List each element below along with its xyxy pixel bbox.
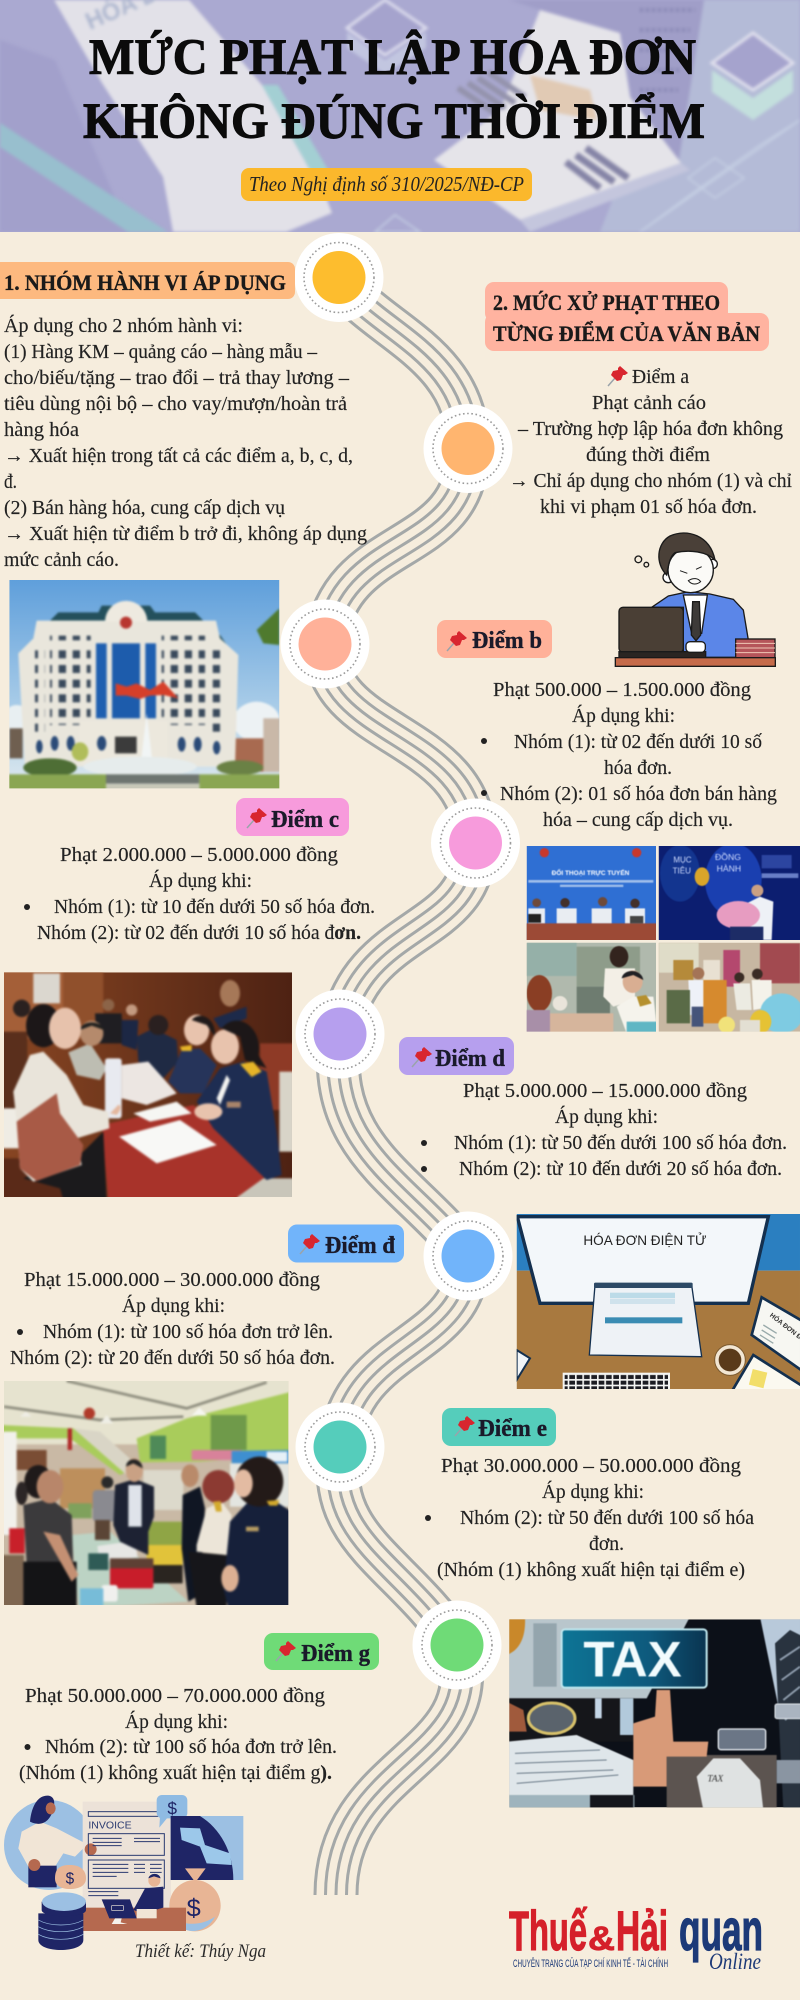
header background illustration — [0, 0, 800, 232]
badge: Điểm g — [264, 1633, 379, 1670]
logo: Thuế & Hải quan Online: Hải — [616, 1899, 668, 1962]
text block: Điểm a: khi vi phạm 01 số hóa đơn. — [540, 496, 757, 518]
timeline node 4 — [431, 798, 520, 888]
text block: Điểm a: Phạt cảnh cáo — [592, 392, 706, 414]
photo: officers at a fruit and grocery shop — [2, 1378, 292, 1608]
title: MỨC PHẠT LẬP HÓA ĐƠN — [89, 30, 696, 86]
section 1 body text: đ. — [4, 471, 17, 493]
badge: Điểm đ: Điểm đ — [325, 1233, 396, 1259]
text block: Điểm đ details: Áp dụng khi: — [122, 1294, 225, 1317]
text block: Điểm e details — [425, 1455, 754, 1581]
logo: Thuế & Hải quan Online: Online — [709, 1949, 761, 1974]
text block: Điểm c details — [24, 844, 375, 944]
illustration: e-invoice on a desktop monitor: HÓA ĐƠN ĐIỆN TỬ — [583, 1231, 707, 1248]
text block: Điểm e details: đơn. — [589, 1533, 624, 1555]
text block: Điểm d details — [421, 1080, 787, 1180]
timeline node 3 — [280, 600, 370, 688]
text block: Điểm b details: Nhóm (2): 01 số hóa đơn bán hàng — [500, 783, 777, 805]
text block: Điểm b details: Nhóm (1): từ 02 đến dưới 10 số — [514, 731, 762, 753]
photo collage: TAX button and documents — [507, 1617, 800, 1810]
icon: pushpin — [412, 1047, 432, 1067]
logo: Thuế & Hải quan Online: Thuế — [509, 1899, 587, 1962]
icon: pushpin — [300, 1234, 320, 1254]
text block: Điểm d details: Nhóm (2): từ 10 đến dưới 20 số hóa đơn. — [459, 1158, 782, 1180]
text block: Điểm b details: Áp dụng khi: — [572, 704, 675, 727]
timeline node 2 — [424, 404, 512, 493]
text block: Điểm d details: Nhóm (1): từ 50 đến dưới 100 số hóa đơn. — [454, 1132, 787, 1154]
section 1 body text: mức cảnh cáo. — [4, 549, 119, 571]
text block: Điểm đ details: Nhóm (2): từ 20 đến dưới 50 số hóa đơn. — [10, 1347, 335, 1369]
badge: Điểm b: Điểm b — [472, 628, 542, 654]
icon: pushpin — [447, 631, 467, 651]
icon: pushpin — [608, 366, 628, 386]
text block: Điểm e details: (Nhóm (1) không xuất hiện tại điểm e) — [437, 1559, 745, 1581]
panel: officer at a shop — [525, 943, 658, 1033]
text block: Điểm b details: hóa đơn. — [604, 757, 672, 779]
text block: Điểm g details: (Nhóm (1) không xuất hiện tại điểm g). — [19, 1762, 332, 1784]
section heading 1: 1. NHÓM HÀNH VI ÁP DỤNG — [4, 270, 286, 295]
title — [83, 30, 705, 150]
illustration: invoice, money bags and coins: INVOICE — [88, 1820, 132, 1831]
section heading 2: 2. MỨC XỬ PHẠT THEO — [493, 290, 720, 315]
title: KHÔNG ĐÚNG THỜI ĐIỂM — [83, 92, 705, 150]
section 1 body text: (2) Bán hàng hóa, cung cấp dịch vụ — [4, 497, 285, 519]
timeline node 6 — [424, 1212, 512, 1300]
panel: online dialogue: ĐỐI THOẠI TRỰC TUYẾN — [552, 867, 630, 877]
panel: conference speaker: TIÊU — [673, 866, 691, 875]
text block: Điểm b details — [481, 679, 777, 831]
text block: Điểm e details: Phạt 30.000.000 – 50.000.000 đồng — [441, 1455, 741, 1477]
panel: conference speaker — [659, 843, 800, 942]
badge: Điểm e: Điểm e — [478, 1416, 547, 1442]
timeline node 8 — [412, 1600, 502, 1690]
photo collage: TAX button and documents: TAX — [583, 1632, 682, 1688]
badge: Điểm d: Điểm d — [435, 1046, 506, 1072]
section 1 body text: → Xuất hiện trong tất cả các điểm a, b, c, d, — [4, 445, 353, 467]
text block: Điểm g details — [19, 1685, 337, 1784]
panel: conference speaker: HÀNH — [717, 864, 741, 874]
timeline node 1 — [294, 233, 384, 322]
subtitle pill: Theo Nghị định số 310/2025/NĐ-CP — [249, 172, 524, 196]
illustration: tired office worker at laptop — [615, 533, 775, 666]
text block: Điểm a: – Trường hợp lập hóa đơn không — [517, 418, 783, 440]
section 1 body text: (1) Hàng KM – quảng cáo – hàng mẫu – — [4, 341, 318, 363]
text block: Điểm a: Điểm a — [632, 366, 689, 388]
text block: Điểm đ details: Nhóm (1): từ 100 số hóa đơn trở lên. — [43, 1321, 333, 1343]
logo: Thuế & Hải quan Online — [509, 1898, 763, 1974]
text block: Điểm b details: hóa – cung cấp dịch vụ. — [543, 809, 733, 831]
section heading 2: TỪNG ĐIỂM CỦA VĂN BẢN — [493, 321, 760, 346]
badge: Điểm e — [442, 1408, 556, 1446]
illustration: invoice, money bags and coins — [4, 1795, 243, 1950]
photo: tax office building — [3, 580, 283, 791]
badge: Điểm đ — [288, 1224, 404, 1262]
badge: Điểm g: Điểm g — [301, 1641, 370, 1667]
section 1 body text: tiêu dùng nội bộ – cho vay/mượn/hoàn trả — [4, 393, 347, 415]
text block: Điểm d details: Phạt 5.000.000 – 15.000.000 đồng — [463, 1080, 747, 1102]
logo: Thuế & Hải quan Online: CHUYÊN TRANG CỦA TẠP CHÍ KINH TẾ - TÀI CHÍNH — [513, 1957, 668, 1970]
subtitle pill — [241, 168, 532, 201]
badge: Điểm c: Điểm c — [271, 807, 339, 833]
panel: conference speaker: ĐỒNG — [715, 851, 741, 862]
section 1 body text: cho/biếu/tặng – trao đổi – trả thay lương – — [4, 367, 350, 389]
text block: Điểm a: → Chỉ áp dụng cho nhóm (1) và chỉ — [509, 470, 792, 492]
logo: Thuế & Hải quan Online: & — [588, 1920, 615, 1958]
text block: Điểm c details: Phạt 2.000.000 – 5.000.000 đồng — [60, 844, 338, 866]
panel: conference speaker: MỤC — [673, 856, 692, 865]
designer credit: Thiết kế: Thúy Nga — [135, 1941, 266, 1962]
winding timeline path — [325, 277, 475, 1895]
text block: Điểm e details: Nhóm (2): từ 50 đến dưới 100 số hóa — [460, 1507, 754, 1529]
badge: Điểm b — [437, 620, 552, 658]
photo collage: TAX button and documents: TAX — [707, 1775, 724, 1785]
text block: Điểm c details: Nhóm (2): từ 02 đến dưới 10 số hóa đơn. — [37, 922, 361, 944]
text block: Điểm d details: Áp dụng khi: — [555, 1105, 658, 1128]
timeline node 7 — [296, 1402, 384, 1492]
timeline node 5 — [296, 990, 384, 1078]
section heading 2 — [485, 282, 769, 351]
photo: tax officers meeting a taxpayer — [2, 970, 295, 1200]
illustration: invoice, money bags and coins: $ — [66, 1870, 75, 1887]
icon: pushpin — [276, 1641, 296, 1661]
text block: Điểm đ details — [10, 1269, 335, 1369]
text block: Điểm g details: Nhóm (2): từ 100 số hóa đơn trở lên. — [45, 1736, 337, 1758]
text block: Điểm a: đúng thời điểm — [586, 444, 710, 466]
text block: Điểm e details: Áp dụng khi: — [542, 1480, 644, 1503]
text block: Điểm b details: Phạt 500.000 – 1.500.000 đồng — [493, 679, 751, 701]
section 1 body text — [4, 314, 367, 571]
section 1 body text: → Xuất hiện từ điểm b trở đi, không áp dụng — [4, 523, 367, 545]
photo collage: tax dialogue and shop visits — [525, 843, 800, 1033]
illustration: invoice, money bags and coins: $ — [167, 1798, 177, 1818]
header banner — [0, 0, 800, 232]
text block: Điểm a — [509, 366, 792, 518]
badge: Điểm c — [236, 798, 349, 836]
icon: pushpin — [247, 808, 267, 828]
text block: Điểm c details: Áp dụng khi: — [149, 869, 252, 892]
section heading 1 — [0, 262, 295, 299]
icon: pushpin — [455, 1416, 475, 1436]
text block: Điểm g details: Phạt 50.000.000 – 70.000.000 đồng — [25, 1685, 325, 1707]
text block: Điểm đ details: Phạt 15.000.000 – 30.000.000 đồng — [24, 1269, 320, 1291]
panel: officers in a market stall — [659, 943, 800, 1033]
section 1 body text: hàng hóa — [4, 419, 79, 441]
text block: Điểm g details: Áp dụng khi: — [125, 1710, 228, 1733]
section 1 body text: Áp dụng cho 2 nhóm hành vi: — [4, 314, 243, 337]
illustration: e-invoice on a desktop monitor — [517, 1214, 800, 1392]
panel: online dialogue — [525, 846, 658, 942]
text block: Điểm c details: Nhóm (1): từ 10 đến dưới 50 số hóa đơn. — [54, 896, 375, 918]
illustration: invoice, money bags and coins: $ — [187, 1895, 201, 1923]
badge: Điểm d — [399, 1037, 514, 1075]
